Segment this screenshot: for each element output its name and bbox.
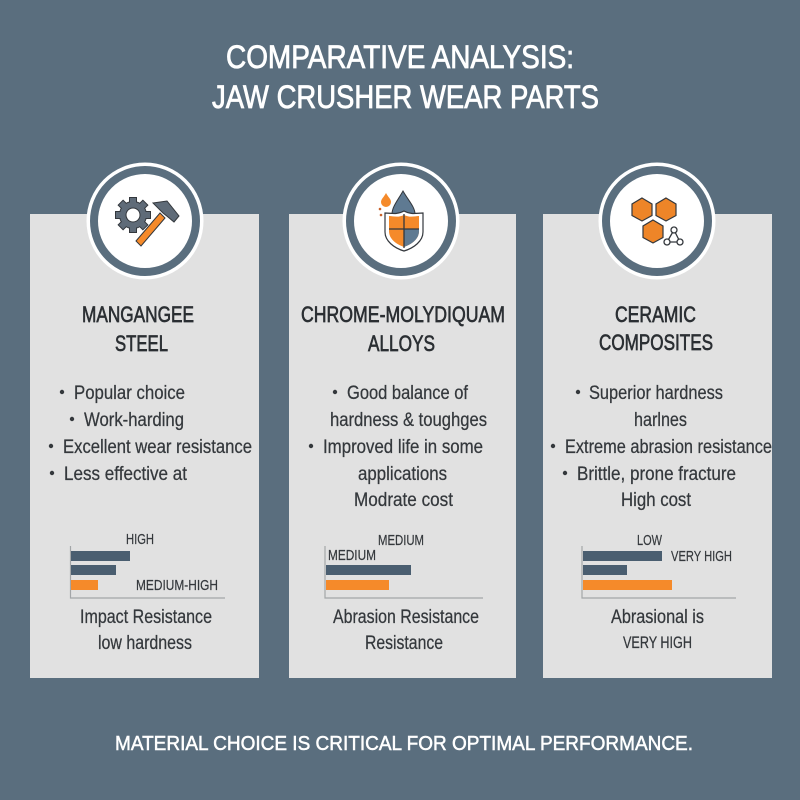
bullet list: Less effective at (64, 464, 188, 485)
bullet list: High cost (621, 490, 692, 511)
heading: CERAMIC (615, 302, 696, 327)
bar chart (582, 532, 736, 598)
card background (289, 214, 516, 678)
icon: gear and hammer (86, 162, 204, 280)
heading: CHROME-MOLYDIQUAM (301, 302, 505, 327)
bar chart: MEDIUM (328, 547, 376, 564)
bar chart: MEDIUM (378, 532, 424, 549)
heading: COMPOSITES (599, 330, 713, 355)
heading (82, 302, 194, 356)
bar chart: MEDIUM-HIGH (136, 577, 218, 594)
chart caption: VERY HIGH (623, 633, 692, 652)
bullet list (309, 383, 487, 511)
footer takeaway: MATERIAL CHOICE IS CRITICAL FOR OPTIMAL PERFORMANCE. (115, 733, 693, 755)
bullet list: hardness & toughges (330, 410, 487, 431)
icon: shield and drop (342, 162, 460, 280)
chart caption: Resistance (365, 633, 443, 654)
bullet list: Improved life in some (323, 437, 483, 458)
heading (301, 302, 505, 356)
bullet list (49, 383, 252, 485)
chart caption: Abrasion Resistance (333, 607, 479, 628)
bullet list: Excellent wear resistance (63, 437, 252, 458)
chart caption (80, 607, 212, 654)
bar chart: HIGH (126, 531, 154, 548)
icon: hexagons and molecule (598, 162, 716, 280)
bullet list: applications (358, 464, 447, 485)
heading: STEEL (115, 331, 168, 356)
chart caption (333, 607, 479, 654)
panel: manganese steel (30, 162, 259, 678)
bar chart (325, 532, 483, 598)
title: JAW CRUSHER WEAR PARTS (212, 79, 599, 115)
bar chart (70, 531, 225, 598)
card background (543, 214, 772, 678)
bullet list: harlnes (634, 410, 687, 431)
chart caption: low hardness (98, 633, 192, 654)
bullet list: Modrate cost (354, 490, 454, 511)
chart caption: Impact Resistance (80, 607, 212, 628)
bar chart: LOW (637, 532, 663, 549)
heading (599, 302, 713, 355)
bullet list: Superior hardness (589, 383, 723, 404)
chart caption (611, 607, 704, 652)
panel: chrome-moly alloys (289, 162, 516, 678)
bullet list: Extreme abrasion resistance (565, 437, 772, 458)
card background (30, 214, 259, 678)
heading: MANGANGEE (82, 302, 194, 327)
bullet list: Popular choice (74, 383, 185, 404)
heading: ALLOYS (368, 331, 435, 356)
bullet list (551, 383, 772, 511)
bullet list: Good balance of (347, 383, 469, 404)
bar chart: VERY HIGH (671, 548, 732, 565)
chart caption: Abrasional is (611, 607, 704, 628)
title: COMPARATIVE ANALYSIS: (226, 39, 574, 75)
title (212, 39, 599, 115)
panel: ceramic composites (543, 162, 772, 678)
bullet list: Brittle, prone fracture (577, 464, 736, 485)
bullet list: Work-harding (84, 410, 184, 431)
